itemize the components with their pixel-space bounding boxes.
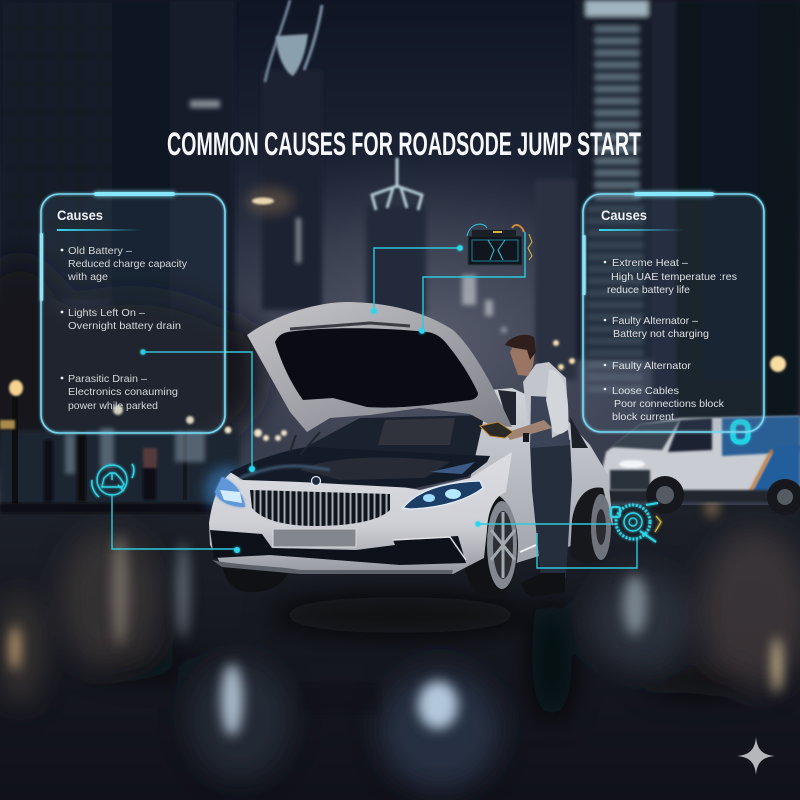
side of car: [470, 388, 613, 565]
connector lines: [112, 232, 637, 568]
rear wheel: [570, 487, 612, 563]
cause list: Parasitic Drain –: [68, 373, 147, 385]
service van: [600, 416, 800, 515]
cause list: Faulty Alternator: [612, 360, 692, 372]
icon: alternator: [611, 503, 661, 542]
cause list: Lights Left On –: [68, 307, 145, 319]
watermark star: [737, 737, 775, 775]
dark trees and promenade: [0, 260, 262, 480]
cause list: Battery not charging: [613, 328, 709, 340]
cause list: reduce battery life: [607, 284, 690, 296]
front wheel: [462, 493, 518, 599]
street lights and bokeh: [0, 187, 786, 504]
trousers: [530, 440, 572, 578]
lower intakes: [210, 530, 466, 565]
shoes: [521, 573, 565, 597]
cause list: Faulty Alternator –: [612, 315, 698, 327]
cause list: with age: [67, 271, 108, 283]
tablet: [480, 422, 513, 438]
car badge: [312, 476, 320, 486]
open hood: [247, 302, 512, 455]
panel heading: Causes: [601, 207, 647, 223]
arm: [546, 370, 568, 434]
car front body: [209, 452, 512, 574]
head: [510, 340, 535, 376]
windshield and cabin: [300, 415, 515, 470]
cause list: Poor connections block: [614, 398, 725, 410]
cause list: Old Battery –: [68, 245, 132, 257]
panel: causes left: [40, 192, 225, 433]
centre tower spire: [372, 158, 422, 210]
cause list: [604, 257, 737, 423]
cause list: block current: [612, 411, 674, 423]
cause list: Extreme Heat –: [612, 257, 688, 269]
number plate: [273, 529, 356, 547]
icon: battery: [467, 224, 532, 265]
car: [204, 302, 613, 599]
arch tower: [265, 0, 322, 82]
technician: [480, 335, 572, 597]
cause list: Loose Cables: [612, 385, 679, 397]
apron: [530, 396, 570, 448]
engine bay: [230, 447, 490, 488]
cause list: High UAE temperatue :res: [611, 271, 737, 283]
left headlight: [215, 477, 245, 507]
cause list: Reduced charge capacity: [68, 258, 188, 270]
grille: [250, 490, 390, 526]
right headlight: [403, 481, 483, 509]
panel heading: Causes: [57, 207, 103, 223]
city background: [0, 0, 800, 530]
headlight halo: [204, 466, 252, 514]
cause list: power while parked: [68, 400, 158, 412]
icon: car diagnostic: [92, 464, 134, 497]
cause list: Overnight battery drain: [68, 320, 181, 332]
left front tyre: [222, 566, 290, 592]
shirt: [523, 362, 569, 442]
wet road with reflections: [0, 499, 800, 800]
van logo: [733, 422, 748, 442]
cause list: Electronics conauming: [68, 386, 178, 398]
cause list: [61, 245, 188, 412]
panel: causes right: [583, 192, 764, 432]
